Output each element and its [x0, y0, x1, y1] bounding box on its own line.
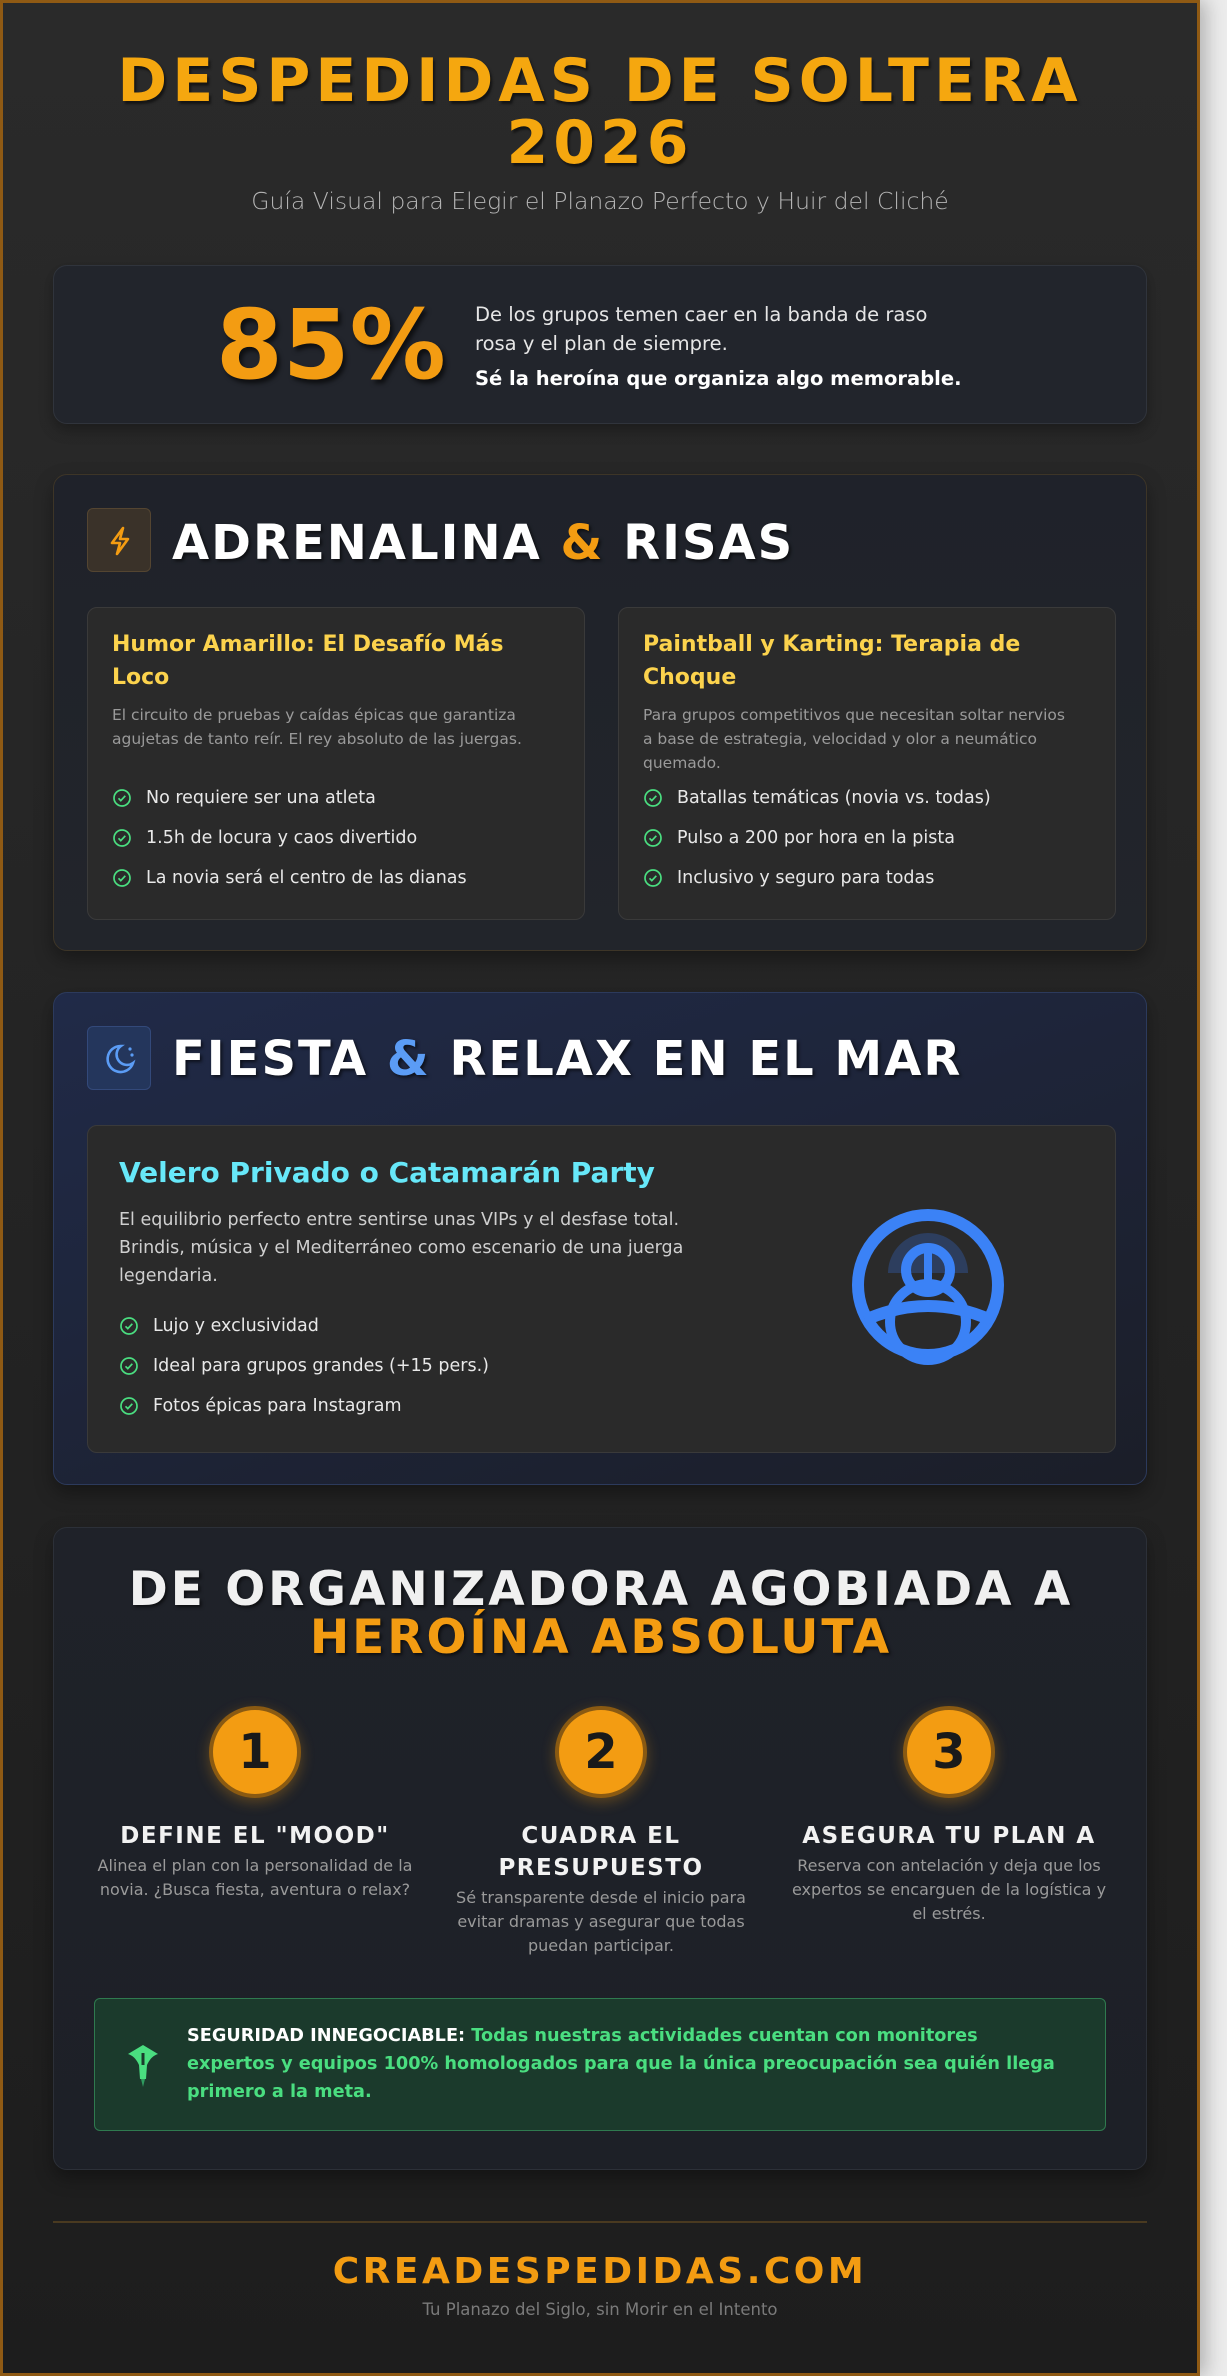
- callout text: [187, 2026, 1055, 2102]
- card description: legendaria.: [119, 1266, 218, 1286]
- heading: HEROÍNA ABSOLUTA: [310, 1610, 892, 1665]
- card description: [643, 706, 1065, 772]
- checklist: 1.5h de locura y caos divertido: [146, 828, 417, 848]
- step 1: [98, 1704, 412, 1899]
- panel: stat: [53, 265, 1147, 424]
- checklist: Pulso a 200 por hora en la pista: [677, 828, 955, 848]
- subtitle: Guía Visual para Elegir el Planazo Perfecto y Huir del Cliché: [251, 187, 949, 215]
- stat text: De los grupos temen caer en la banda de raso: [475, 303, 927, 326]
- icon: lightning: [87, 508, 151, 572]
- icon: moon: [87, 1026, 151, 1090]
- stat text: Sé la heroína que organiza algo memorable.: [475, 367, 961, 390]
- stat text: [475, 303, 961, 390]
- step 1: novia. ¿Busca fiesta, aventura o relax?: [100, 1880, 410, 1899]
- card description: [119, 1210, 683, 1286]
- card description: [112, 706, 522, 748]
- step 3: ASEGURA TU PLAN A: [802, 1823, 1096, 1849]
- stat text: rosa y el plan de siempre.: [475, 332, 728, 355]
- step 2: CUADRA EL: [521, 1823, 681, 1849]
- card: velero: [87, 1125, 1116, 1453]
- card title: Paintball y Karting: Terapia de: [643, 632, 1020, 657]
- heading: FIESTA & RELAX EN EL MAR: [172, 1031, 962, 1087]
- card description: agujetas de tanto reír. El rey absoluto de las juergas.: [112, 730, 522, 748]
- callout text: expertos y equipos 100% homologados para que la única preocupación sea quién llega: [187, 2054, 1055, 2074]
- heading: DE ORGANIZADORA AGOBIADA A: [129, 1562, 1073, 1617]
- checklist: Inclusivo y seguro para todas: [677, 868, 934, 888]
- card description: Para grupos competitivos que necesitan soltar nervios: [643, 706, 1065, 724]
- icon: rocket: [128, 2045, 158, 2087]
- panel: heroína: [53, 1527, 1147, 2170]
- divider: [53, 2221, 1147, 2223]
- step 1: Alinea el plan con la personalidad de la: [98, 1856, 412, 1875]
- number badge: [555, 1706, 647, 1798]
- card: paintball: [618, 607, 1116, 920]
- checklist: No requiere ser una atleta: [146, 788, 376, 808]
- number badge: 3: [932, 1724, 966, 1780]
- card description: Brindis, música y el Mediterráneo como escenario de una juerga: [119, 1238, 683, 1258]
- checklist: Lujo y exclusividad: [153, 1316, 319, 1336]
- step 3: el estrés.: [912, 1904, 986, 1923]
- heading: ADRENALINA & RISAS: [172, 515, 794, 571]
- card description: El equilibrio perfecto entre sentirse unas VIPs y el desfase total.: [119, 1210, 679, 1230]
- checklist: Ideal para grupos grandes (+15 pers.): [153, 1356, 489, 1376]
- title: DESPEDIDAS DE SOLTERA: [117, 46, 1083, 116]
- title: [117, 46, 1083, 178]
- footer brand: CREADESPEDIDAS.COM: [333, 2251, 867, 2292]
- panel: adrenalina: [53, 474, 1147, 951]
- callout text: primero a la meta.: [187, 2082, 372, 2102]
- step 3: [792, 1704, 1106, 1923]
- step 2: evitar dramas y asegurar que todas: [457, 1912, 745, 1931]
- card description: a base de estrategia, velocidad y olor a neumático: [643, 730, 1037, 748]
- card title: [112, 632, 504, 690]
- panel: fiesta mar: [53, 992, 1147, 1485]
- number badge: [209, 1706, 301, 1798]
- checklist: Batallas temáticas (novia vs. todas): [677, 788, 991, 808]
- checklist: [120, 1316, 489, 1416]
- footer tagline: Tu Planazo del Siglo, sin Morir en el Intento: [422, 2300, 778, 2319]
- title: 2026: [506, 108, 694, 178]
- step 1: DEFINE EL "MOOD": [120, 1823, 390, 1849]
- checklist: [644, 788, 991, 888]
- step 2: PRESUPUESTO: [498, 1855, 704, 1881]
- step 3: expertos se encarguen de la logística y: [792, 1880, 1106, 1899]
- number badge: 2: [584, 1724, 618, 1780]
- step 2: puedan participar.: [528, 1936, 674, 1955]
- checklist: La novia será el centro de las dianas: [146, 868, 467, 888]
- callout text: SEGURIDAD INNEGOCIABLE: Todas nuestras actividades cuentan con monitores: [187, 2026, 978, 2046]
- card title: Choque: [643, 665, 736, 690]
- card description: quemado.: [643, 754, 721, 772]
- card title: Velero Privado o Catamarán Party: [119, 1156, 655, 1189]
- number badge: [903, 1706, 995, 1798]
- card title: Loco: [112, 665, 169, 690]
- checklist: [113, 788, 467, 888]
- stat number: 85%: [216, 289, 446, 401]
- step 3: Reserva con antelación y deja que los: [797, 1856, 1101, 1875]
- callout: seguridad: [94, 1998, 1106, 2131]
- card title: [643, 632, 1020, 690]
- number badge: 1: [238, 1724, 272, 1780]
- icon: steering wheel: [852, 1209, 1004, 1365]
- heading: [129, 1562, 1073, 1665]
- card description: El circuito de pruebas y caídas épicas que garantiza: [112, 706, 516, 724]
- step 2: [456, 1704, 746, 1955]
- checklist: Fotos épicas para Instagram: [153, 1396, 402, 1416]
- card: humor amarillo: [87, 607, 585, 920]
- step 2: Sé transparente desde el inicio para: [456, 1888, 746, 1907]
- card title: Humor Amarillo: El Desafío Más: [112, 632, 504, 657]
